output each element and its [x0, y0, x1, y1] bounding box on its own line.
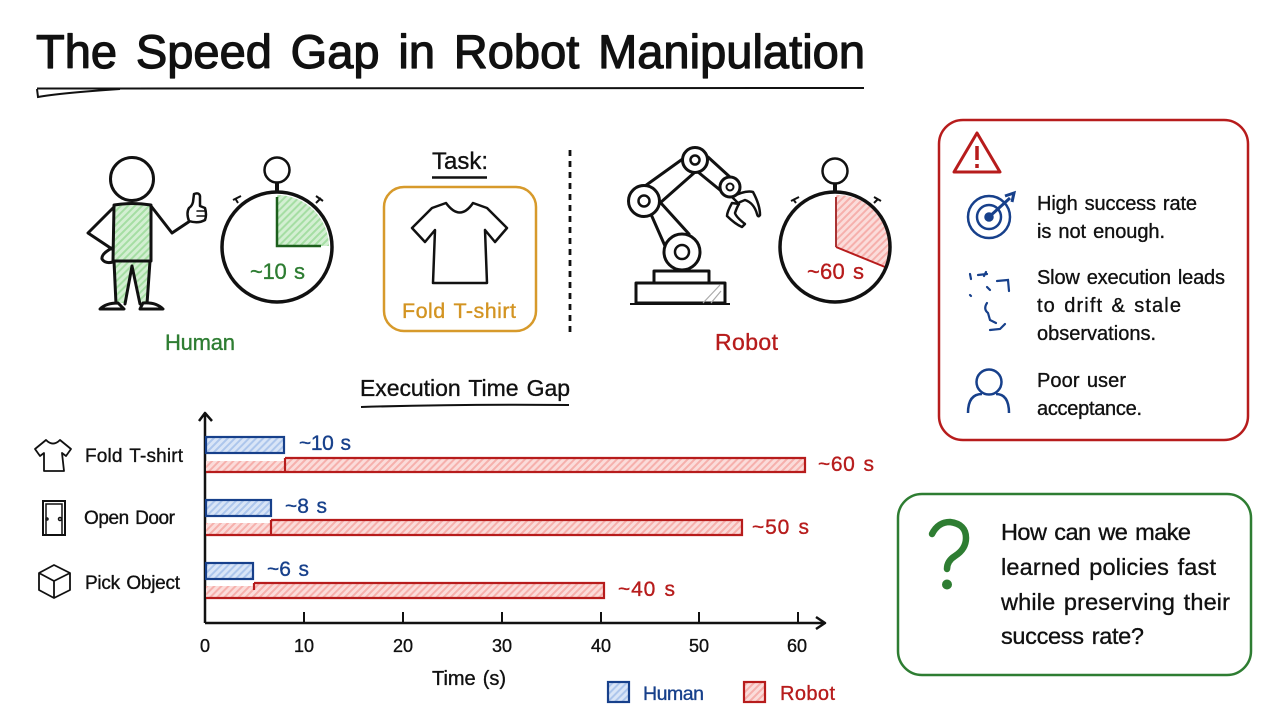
- icon: cube: [39, 565, 70, 598]
- row: fold t-shirt: Fold T-shirt: [85, 446, 184, 467]
- icon: human figure: [88, 158, 206, 309]
- icon: question mark: [932, 522, 966, 590]
- question text: while preserving their: [1000, 589, 1230, 615]
- warning text: drift: to drift & stale: [1037, 295, 1181, 317]
- icon: small t-shirt: [35, 440, 71, 471]
- axis numbers: 50: [689, 636, 709, 656]
- stopwatch label: ~60 s: [807, 259, 864, 284]
- warning text: success: High success rate: [1037, 193, 1197, 215]
- robot label: Robot: [715, 329, 779, 355]
- task heading: Task:: [432, 148, 488, 175]
- icon: t-shirt: [412, 203, 507, 283]
- human label: Human: [165, 330, 235, 355]
- row: open door: ~8 s: [285, 495, 327, 518]
- icon: robot stopwatch: [780, 158, 890, 302]
- axis numbers: 10: [294, 636, 314, 656]
- legend: Human: [643, 683, 704, 705]
- icon: warning triangle: [954, 133, 1000, 172]
- row: fold t-shirt: ~10 s: [299, 432, 351, 455]
- warning text: drift: observations.: [1037, 323, 1156, 345]
- axis numbers: 60: [787, 636, 807, 656]
- row: open door: Open Door: [84, 508, 176, 529]
- row: open door: [43, 495, 809, 539]
- row: pick object: [39, 558, 675, 601]
- icon: human stopwatch: [222, 158, 332, 302]
- row: pick object: ~6 s: [267, 558, 309, 581]
- question text: learned policies fast: [1001, 554, 1216, 580]
- warning text: acceptance: acceptance.: [1037, 398, 1142, 420]
- title: The Speed Gap in Robot Manipulation: [36, 25, 865, 78]
- icon: door: [43, 501, 65, 535]
- panel: warnings: [939, 120, 1248, 440]
- task label: Fold T-shirt: [402, 299, 516, 323]
- panel: task: [384, 148, 536, 331]
- legend: Robot: [780, 683, 835, 705]
- axes: [199, 413, 825, 629]
- row: pick object: ~40 s: [618, 578, 675, 601]
- icon: robot arm: [628, 148, 760, 304]
- warning text: drift: Slow execution leads: [1037, 267, 1225, 289]
- panel: human: [88, 158, 332, 355]
- chart: execution time gap: [35, 375, 874, 705]
- panel: robot: [628, 148, 890, 355]
- icon: user: [968, 370, 1009, 413]
- row: open door: ~50 s: [752, 516, 809, 539]
- row: fold t-shirt: ~60 s: [818, 453, 874, 476]
- task box: [384, 187, 536, 331]
- axis numbers: 30: [492, 636, 512, 656]
- panel: question: [898, 494, 1251, 675]
- question text: How can we make: [1001, 519, 1191, 545]
- warning text: acceptance: Poor user: [1037, 370, 1126, 392]
- axis numbers: 40: [591, 636, 611, 656]
- warning text: success: is not enough.: [1037, 221, 1165, 243]
- axis numbers: [200, 636, 807, 656]
- question text: success rate?: [1001, 623, 1144, 649]
- legend: [608, 682, 835, 705]
- row: pick object: Pick Object: [85, 573, 181, 594]
- axis numbers: 20: [393, 636, 413, 656]
- chart heading: Execution Time Gap: [360, 375, 570, 401]
- divider: [569, 150, 571, 332]
- axis numbers: 0: [200, 636, 210, 656]
- icon: drift fragments: [970, 272, 1009, 330]
- axis title: Time (s): [432, 668, 506, 690]
- row: fold t-shirt: [35, 432, 874, 476]
- icon: target: [968, 193, 1014, 238]
- stopwatch label: ~10 s: [250, 259, 305, 284]
